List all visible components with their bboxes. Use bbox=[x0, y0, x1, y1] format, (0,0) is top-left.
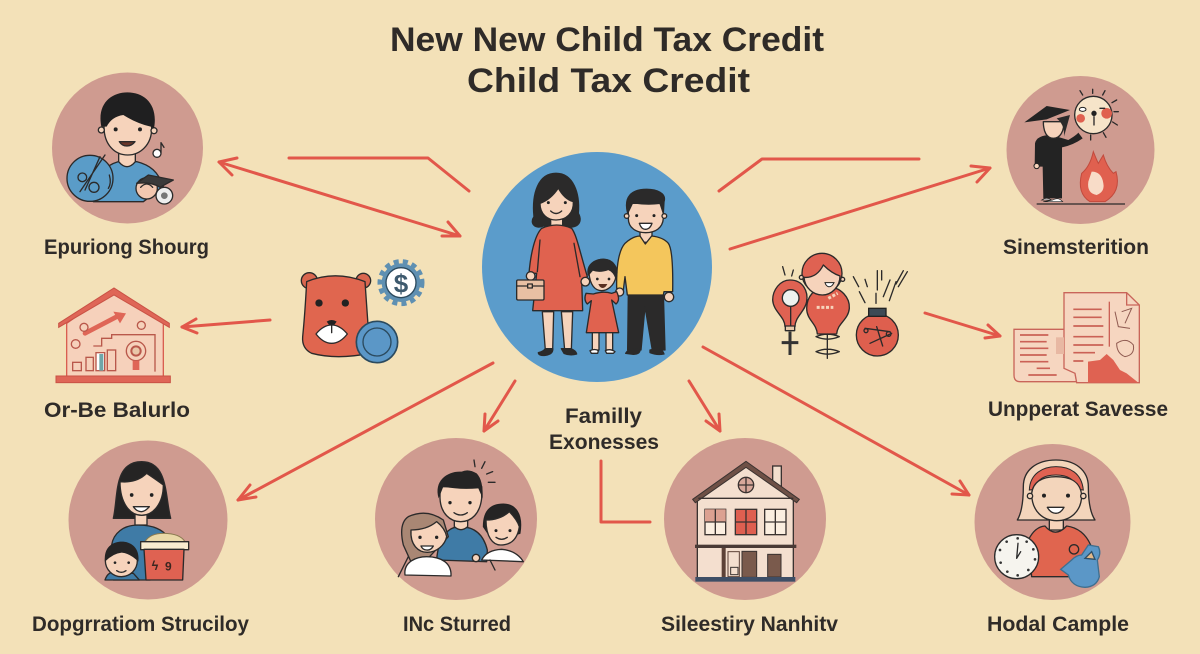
icon: person with percent badge bbox=[67, 92, 173, 204]
title: Child Tax Credit bbox=[467, 62, 750, 100]
icon: house with growth chart bbox=[56, 288, 170, 383]
label: Or-Be Balurlo bbox=[44, 399, 190, 422]
icon: mother bbox=[517, 173, 590, 355]
panel: Sinemsterition bbox=[1003, 76, 1154, 259]
panel: Epuriong Shourg bbox=[44, 72, 209, 259]
icon: documents bbox=[1014, 293, 1139, 383]
panel: Sileestiry Nanhitv bbox=[661, 438, 838, 636]
icon: child bbox=[585, 259, 619, 353]
panel: INc Sturred bbox=[375, 438, 537, 636]
label: family expenses bbox=[549, 405, 659, 454]
label: family expenses: Familly bbox=[565, 405, 642, 428]
label: Unpperat Savesse bbox=[988, 398, 1168, 421]
panel: Or-Be Balurlo bbox=[44, 288, 190, 422]
icon: father bbox=[616, 189, 674, 354]
icon: lightbulbs and jar cluster bbox=[773, 253, 907, 358]
title: New New Child Tax Credit bbox=[390, 21, 824, 59]
panel: Hodal Cample bbox=[974, 444, 1130, 636]
panel: central family bbox=[482, 152, 712, 382]
icon: woman with clock and bird bbox=[995, 460, 1100, 587]
icon: bear with coin and gear: $ bbox=[394, 268, 409, 298]
label: Hodal Cample bbox=[987, 613, 1129, 636]
label: Epuriong Shourg bbox=[44, 236, 209, 259]
icon: bear with coin and gear bbox=[301, 262, 422, 363]
panel: Unpperat Savesse bbox=[988, 293, 1168, 421]
label: Sinemsterition bbox=[1003, 236, 1149, 259]
label: family expenses: Exonesses bbox=[549, 431, 659, 454]
panel: Dopgrratiom Struciloy bbox=[32, 440, 249, 636]
icon: two-storey house bbox=[693, 461, 799, 582]
label: INc Sturred bbox=[403, 613, 511, 636]
icon: graduate with sun and flame bbox=[1024, 89, 1125, 204]
icon: mother with child and bucket: 9 bbox=[165, 560, 172, 574]
label: Dopgrratiom Struciloy bbox=[32, 613, 249, 636]
icon: mother with child and bucket: ϟ bbox=[152, 559, 159, 573]
title bbox=[390, 21, 824, 100]
icon: mother with child and bucket bbox=[105, 462, 189, 580]
label: Sileestiry Nanhitv bbox=[661, 613, 838, 636]
icon: parent with two children bbox=[398, 460, 523, 577]
arrows network bbox=[182, 158, 1000, 522]
